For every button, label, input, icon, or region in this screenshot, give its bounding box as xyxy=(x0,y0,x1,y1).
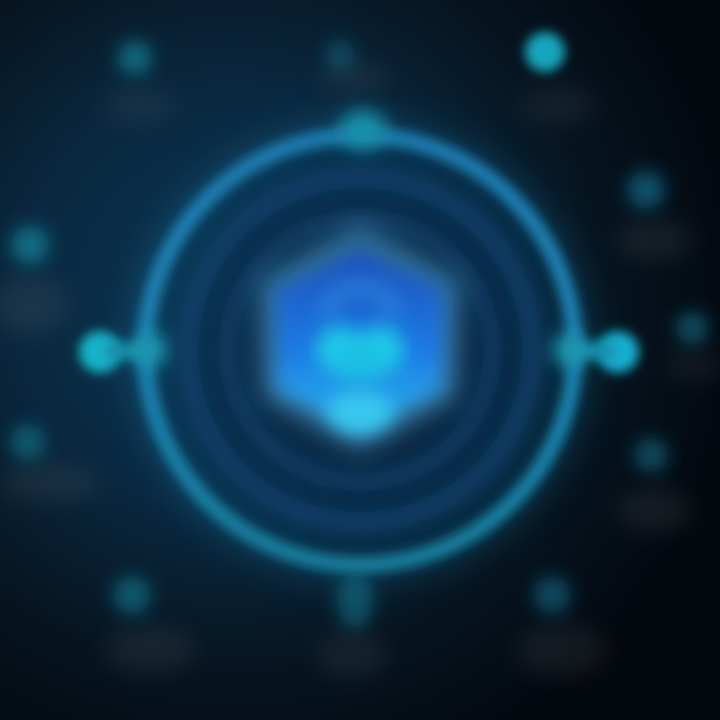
ring node: top xyxy=(339,110,387,150)
peripheral node: right lower xyxy=(617,438,693,532)
peripheral node: bottom left xyxy=(104,576,196,674)
peripheral node: right middle xyxy=(665,312,720,380)
peripheral node: bottom right xyxy=(516,576,608,676)
peripheral node: top right xyxy=(520,32,596,125)
peripheral node: top centre xyxy=(319,40,391,93)
peripheral node: left lower xyxy=(0,424,100,500)
central shield xyxy=(258,222,462,452)
lock shackle xyxy=(328,287,392,322)
lock body xyxy=(316,326,404,381)
ring node: left connector xyxy=(79,331,167,373)
peripheral node: left upper xyxy=(0,226,68,335)
shield glow xyxy=(258,222,462,452)
peripheral node: bottom centre xyxy=(316,572,388,677)
rings xyxy=(145,135,575,565)
ring node: right connector xyxy=(553,331,639,373)
shield bottom glow xyxy=(328,392,392,432)
shield body xyxy=(275,248,445,432)
peripheral node: right upper xyxy=(617,171,693,260)
peripheral node: top left xyxy=(104,41,176,123)
